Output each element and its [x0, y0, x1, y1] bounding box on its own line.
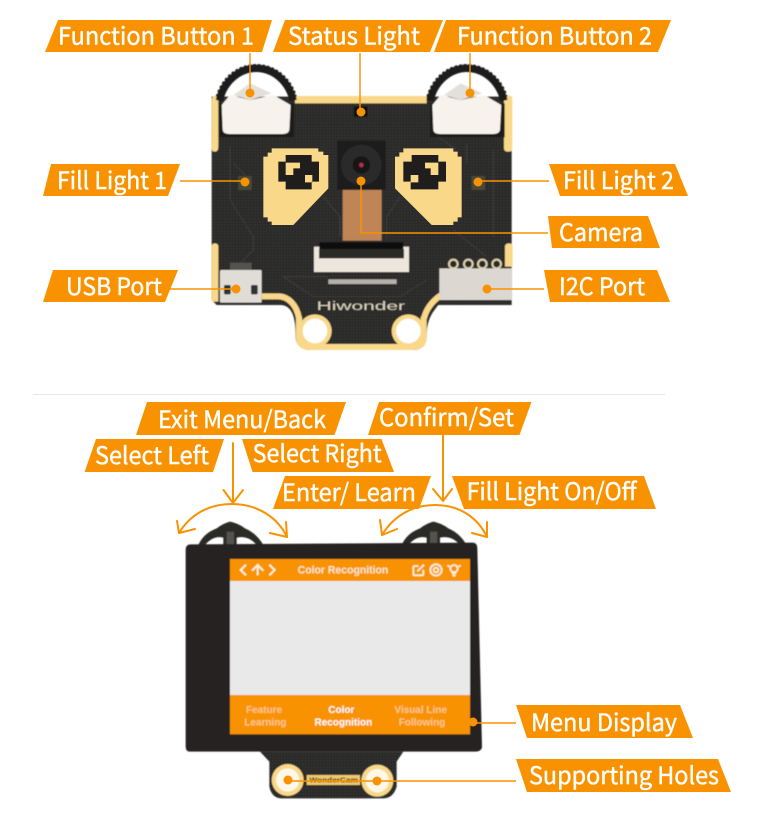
FPC connector — [314, 242, 409, 284]
label: Select Left: Select Left — [95, 436, 209, 471]
brand name: Hiwonder — [317, 299, 405, 313]
menu item: Visual Line Following: Visual Line — [394, 705, 447, 716]
mounting tab — [260, 752, 403, 798]
label: Status Light: Status Light — [288, 16, 420, 52]
label: Function Button 1: Function Button 1 — [58, 16, 254, 52]
leader lines for bottom device — [284, 718, 516, 786]
gold tab outline — [262, 295, 441, 347]
status LED — [354, 107, 367, 117]
label: Select Right: Select Right — [253, 434, 382, 469]
menu item: Feature Learning: Feature — [246, 705, 282, 716]
label: Fill Light On/Off: Fill Light On/Off — [467, 472, 638, 507]
right gold eye pad — [395, 148, 462, 225]
screen nav icons — [241, 565, 275, 575]
circuit traces — [230, 133, 493, 297]
screen action icons — [413, 564, 461, 576]
device body — [186, 543, 482, 752]
menu item: Feature Learning: Learning — [244, 717, 286, 728]
label: Menu Display: Menu Display — [531, 703, 677, 738]
camera module — [337, 141, 386, 189]
screen — [230, 559, 470, 734]
mounting holes — [298, 314, 425, 348]
label: Function Button 2: Function Button 2 — [457, 16, 652, 52]
label: Exit Menu/Back: Exit Menu/Back — [158, 400, 326, 435]
menu item: Color Recognition: Recognition — [314, 717, 372, 728]
right wheel — [402, 522, 467, 545]
leader lines and dots for top board — [165, 53, 549, 294]
right selector arrows — [380, 435, 487, 537]
label: Enter/ Learn: Enter/ Learn — [282, 473, 416, 508]
USB port — [220, 263, 262, 303]
fill light LED 2 — [472, 176, 485, 190]
left selector arrows — [177, 443, 287, 537]
screen title: Color Recognition — [298, 564, 388, 576]
top board: WonderCam back view — [212, 65, 513, 350]
left function wheel — [217, 65, 296, 137]
I2C port — [439, 260, 512, 300]
label: Fill Light 2: Fill Light 2 — [563, 161, 674, 196]
left wheel — [198, 522, 263, 545]
camera flex ribbon — [343, 190, 382, 241]
label: Fill Light 1: Fill Light 1 — [57, 161, 167, 196]
bottom device: front view — [186, 522, 482, 798]
right function wheel — [427, 65, 507, 137]
board body — [212, 97, 512, 350]
divider — [33, 394, 665, 395]
label: I2C Port: I2C Port — [559, 267, 645, 302]
menu item: Visual Line Following: Following — [399, 717, 445, 728]
label: Supporting Holes: Supporting Holes — [529, 756, 719, 791]
gold edge strips — [212, 95, 513, 302]
left gold eye pad — [263, 148, 328, 225]
mounting tab: WonderCam — [309, 776, 359, 785]
label: Camera: Camera — [559, 213, 643, 248]
label: USB Port: USB Port — [66, 267, 162, 302]
menu item: Color Recognition: Color — [328, 705, 354, 716]
label: Confirm/Set: Confirm/Set — [379, 398, 514, 433]
fill light LED 1 — [238, 176, 252, 190]
